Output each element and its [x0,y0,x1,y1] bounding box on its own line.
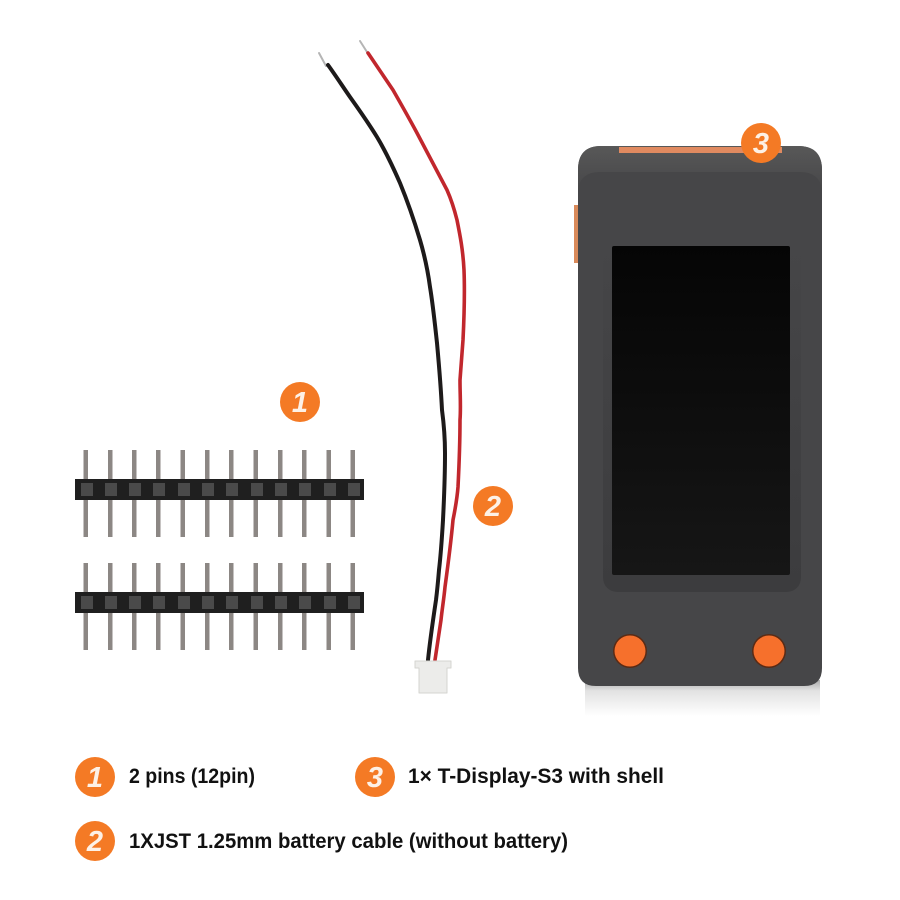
badge 1 above pins [280,382,320,422]
shell body [578,146,822,686]
left button [613,634,647,668]
screen [612,246,790,575]
pin header row 1 [75,450,364,537]
badge 2 beside cable: 2 [484,491,501,523]
pin headers [75,450,364,537]
legend item 2: 2 [86,826,103,858]
badge 3 on device: 3 [753,128,769,160]
right button [752,634,786,668]
device with shell [574,146,822,716]
legend item 1: 1 [87,762,103,794]
battery cable [319,41,464,693]
screen recess [603,238,801,592]
legend item 2 [75,821,568,861]
badge 2 beside cable [473,486,513,526]
pin header row 2 [75,563,364,650]
legend item 3 [355,757,664,797]
legend item 3: 1× T-Display-S3 with shell [408,765,664,788]
badge 1 above pins: 1 [292,387,308,419]
badge 3 on device [741,123,781,163]
legend item 1: 2 pins (12pin) [129,765,255,788]
shell top bevel [578,146,822,190]
JST connector [415,661,451,693]
legend item 3: 3 [367,762,383,794]
legend item 1 [75,757,255,797]
legend item 2: 1XJST 1.25mm battery cable (without battery) [129,830,568,853]
orange side tabs [574,205,579,263]
floor shadow [585,680,820,716]
orange top strip [619,147,782,153]
